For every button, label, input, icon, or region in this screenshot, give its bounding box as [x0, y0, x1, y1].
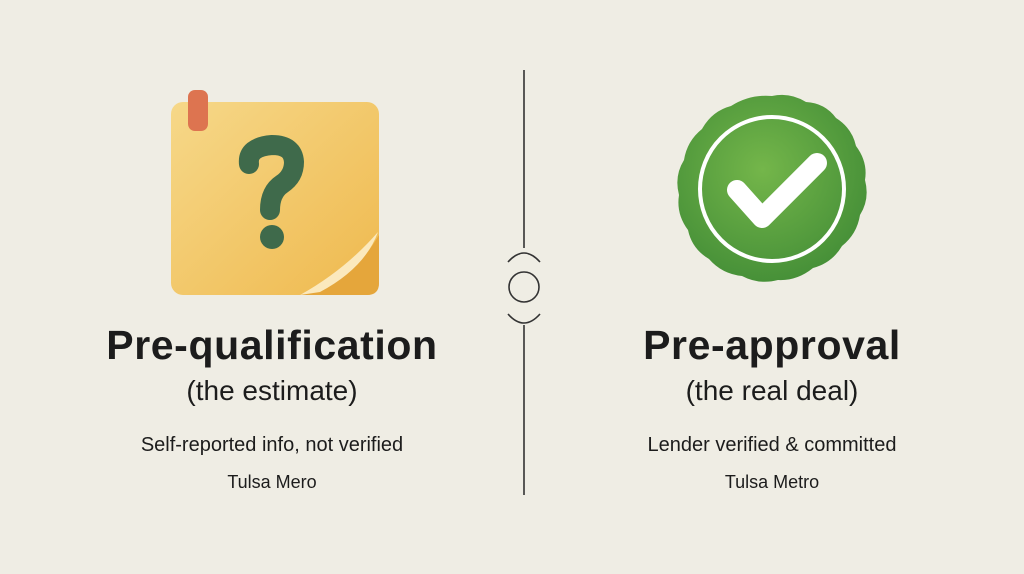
left heading: Pre-qualification — [106, 322, 438, 368]
left subheading: (the estimate) — [186, 375, 358, 406]
right subheading: (the real deal) — [686, 375, 858, 406]
right heading: Pre-approval — [643, 322, 901, 368]
left description: Self-reported info, not verified — [141, 434, 403, 456]
right description: Lender verified & committed — [647, 434, 896, 456]
left location: Tulsa Mero — [227, 472, 317, 492]
icon: sticky note with question mark — [171, 90, 379, 295]
right location: Tulsa Metro — [725, 472, 819, 492]
divider with circle — [508, 70, 540, 495]
icon: green badge with check — [677, 94, 867, 282]
